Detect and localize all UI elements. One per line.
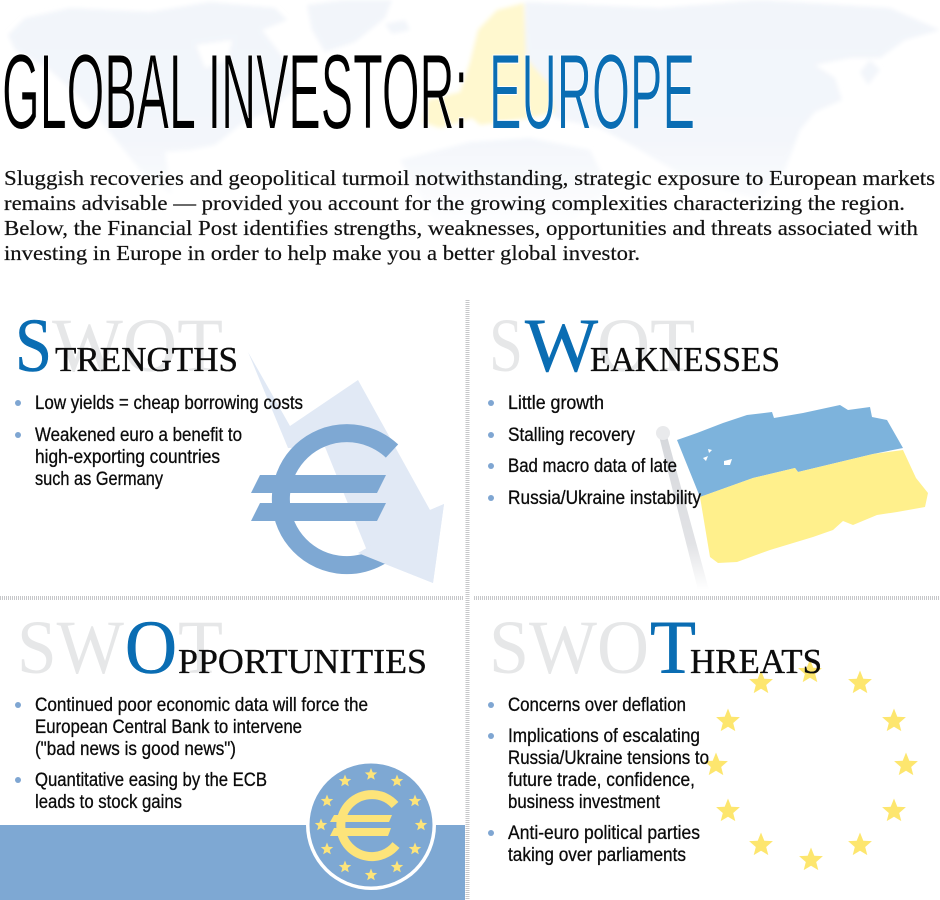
panel: strengths	[15, 304, 444, 583]
weaknesses list: Russia/Ukraine instability	[508, 487, 701, 509]
heading: opportunities: SW	[17, 606, 124, 690]
text: EUROPE	[489, 32, 695, 152]
heading: opportunities: PPORTUNITIES	[178, 642, 427, 681]
threats list: business investment	[508, 791, 661, 813]
intro text block: Below, the Financial Post identifies strengths, weaknesses, opportunities and threats associated with	[4, 216, 918, 240]
heading: weaknesses: S	[489, 304, 523, 388]
strengths list: such as Germany	[35, 468, 163, 490]
strengths list	[15, 392, 303, 490]
strengths list: Low yields = cheap borrowing costs	[35, 392, 303, 414]
icon: EU star ring	[704, 660, 918, 870]
strengths list: Weakened euro a benefit to	[35, 424, 242, 446]
icon: euro symbol	[251, 433, 392, 565]
opportunities list: Quantitative easing by the ECB	[35, 769, 267, 791]
heading: threats	[489, 606, 822, 690]
weaknesses list	[488, 392, 701, 509]
heading: weaknesses: OT	[597, 304, 695, 388]
threats list: Implications of escalating	[508, 725, 700, 747]
threats list: taking over parliaments	[508, 844, 686, 866]
threats list	[488, 694, 709, 866]
opportunities list: ("bad news is good news")	[35, 738, 236, 760]
heading: threats: SWO	[489, 606, 649, 690]
intro text block	[4, 166, 935, 265]
intro text block: remains advisable — provided you account for the growing complexities characterizing the region.	[4, 191, 905, 215]
threats list: Anti-euro political parties	[508, 822, 700, 844]
heading: threats: HREATS	[690, 642, 822, 681]
opportunities list: leads to stock gains	[35, 791, 182, 813]
threats list: Russia/Ukraine tensions to	[508, 747, 709, 769]
weaknesses list: Stalling recovery	[508, 424, 635, 446]
icon: falling arrow	[248, 352, 444, 583]
heading: weaknesses: W	[525, 304, 598, 388]
threats list: future trade, confidence,	[508, 769, 695, 791]
heading: weaknesses: EAKNESSES	[590, 340, 780, 379]
intro text block: investing in Europe in order to help make you a better global investor.	[4, 241, 640, 265]
icon: ukraine flag	[656, 405, 928, 590]
heading: strengths: S	[15, 304, 52, 388]
heading: opportunities: O	[125, 606, 177, 690]
icon: ECB euro seal	[306, 760, 436, 890]
opportunities list: European Central Bank to intervene	[35, 716, 302, 738]
opportunities list	[15, 694, 368, 813]
blue footer band	[0, 825, 465, 900]
panel: weaknesses	[488, 304, 928, 590]
heading: threats: T	[650, 606, 696, 690]
weaknesses list: Bad macro data of late	[508, 455, 677, 477]
panel: threats	[488, 606, 918, 870]
opportunities list: Continued poor economic data will force the	[35, 694, 368, 716]
heading: strengths: TRENGTHS	[55, 340, 238, 379]
panel: opportunities	[0, 606, 465, 900]
heading: strengths: WOT	[52, 304, 223, 388]
heading: weaknesses	[489, 304, 780, 388]
threats list: Concerns over deflation	[508, 694, 686, 716]
weaknesses list: Little growth	[508, 392, 604, 414]
heading: opportunities	[17, 606, 427, 690]
strengths list: high-exporting countries	[35, 446, 220, 468]
intro text block: Sluggish recoveries and geopolitical turmoil notwithstanding, strategic exposure to European markets	[4, 166, 935, 190]
icon: arrow head over euro	[358, 504, 444, 583]
world map background	[8, 0, 940, 230]
heading: opportunities: T	[178, 606, 223, 690]
